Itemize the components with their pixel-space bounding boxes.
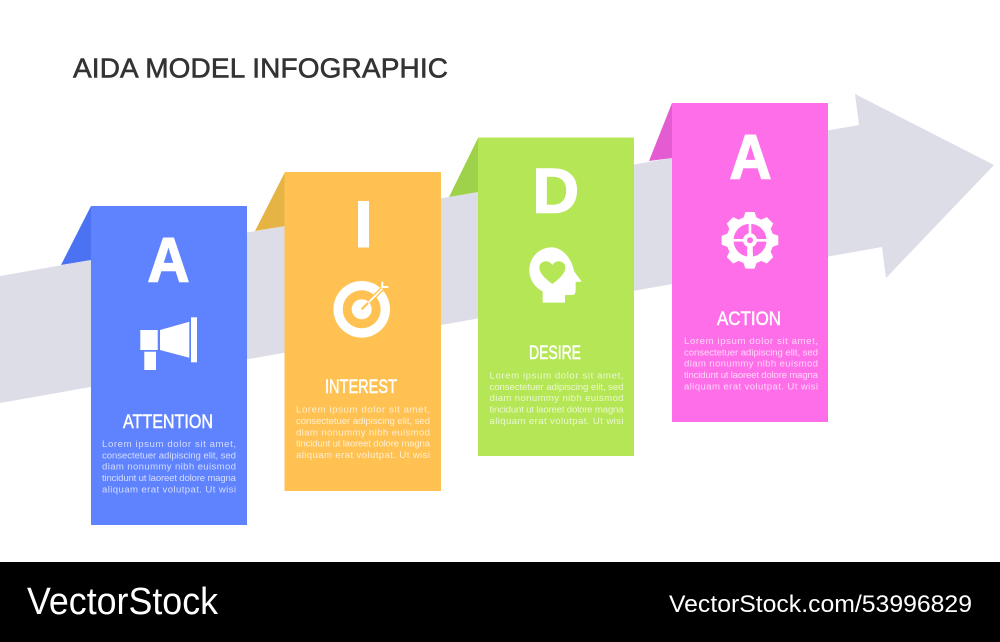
text block: attention — [102, 439, 237, 495]
card: desire — [478, 138, 634, 456]
text block: action — [684, 336, 819, 392]
text block: action: tincidunt ut laoreet dolore magna — [684, 370, 819, 381]
footer logo: VectorStock — [27, 581, 219, 623]
panel: desire — [449, 138, 634, 456]
panel: interest — [255, 172, 441, 491]
text block: interest: Lorem ipsum dolor sit amet, — [296, 405, 430, 416]
icon: gear — [722, 212, 778, 269]
text block: action: aliquam erat volutpat. Ut wisi — [684, 381, 818, 392]
text block: attention: diam nonummy nibh euismod — [102, 462, 236, 473]
text block: desire: tincidunt ut laoreet dolore magna — [490, 404, 624, 416]
text block: attention: consectetuer adipiscing elit, sed — [102, 450, 236, 461]
text block: attention: Lorem ipsum dolor sit amet, — [102, 439, 236, 450]
fold: desire — [449, 138, 478, 197]
letter A: A — [148, 226, 190, 296]
panel: action — [649, 103, 828, 422]
card: interest — [284, 172, 441, 491]
text block: desire: aliquam erat volutpat. Ut wisi — [490, 416, 624, 427]
heading: interest: INTEREST — [325, 377, 397, 398]
text block: interest — [296, 405, 431, 461]
footer bar — [0, 562, 1000, 642]
fold: attention — [61, 206, 91, 265]
text block: desire: consectetuer adipiscing elit, sed — [490, 382, 624, 393]
icon: megaphone — [140, 317, 197, 370]
text block: interest: tincidunt ut laoreet dolore magna — [296, 439, 431, 450]
panel: attention — [61, 206, 247, 525]
letter I — [358, 201, 369, 248]
text block: desire: diam nonummy nibh euismod — [490, 393, 624, 404]
text block: action: diam nonummy nibh euismod — [684, 359, 818, 370]
text block: desire — [490, 370, 624, 427]
text block: desire: Lorem ipsum dolor sit amet, — [490, 370, 624, 382]
heading: attention: ATTENTION — [123, 412, 213, 433]
card: attention — [91, 206, 247, 525]
text block: action: consectetuer adipiscing elit, sed — [684, 347, 818, 358]
text block: interest: consectetuer adipiscing elit, sed — [296, 416, 430, 427]
card: action — [672, 103, 828, 422]
icon: target with dart — [333, 281, 390, 338]
icon: head with heart — [529, 247, 582, 303]
title: AIDA MODEL INFOGRAPHIC — [73, 52, 448, 84]
text block: action: Lorem ipsum dolor sit amet, — [684, 336, 818, 347]
text block: attention: aliquam erat volutpat. Ut wisi — [102, 484, 236, 495]
text block: interest: aliquam erat volutpat. Ut wisi — [296, 450, 430, 461]
arrow: rising background arrow — [0, 94, 994, 403]
letter D: D — [532, 156, 579, 226]
fold: interest — [255, 172, 285, 231]
heading: desire: DESIRE — [529, 343, 581, 364]
text block: interest: diam nonummy nibh euismod — [296, 427, 430, 438]
letter A: A — [730, 122, 772, 192]
heading: action: ACTION — [717, 309, 781, 330]
text block: attention: tincidunt ut laoreet dolore magna — [102, 473, 237, 484]
footer image id: VectorStock.com/53996829 — [669, 591, 972, 618]
fold: action — [649, 103, 672, 161]
